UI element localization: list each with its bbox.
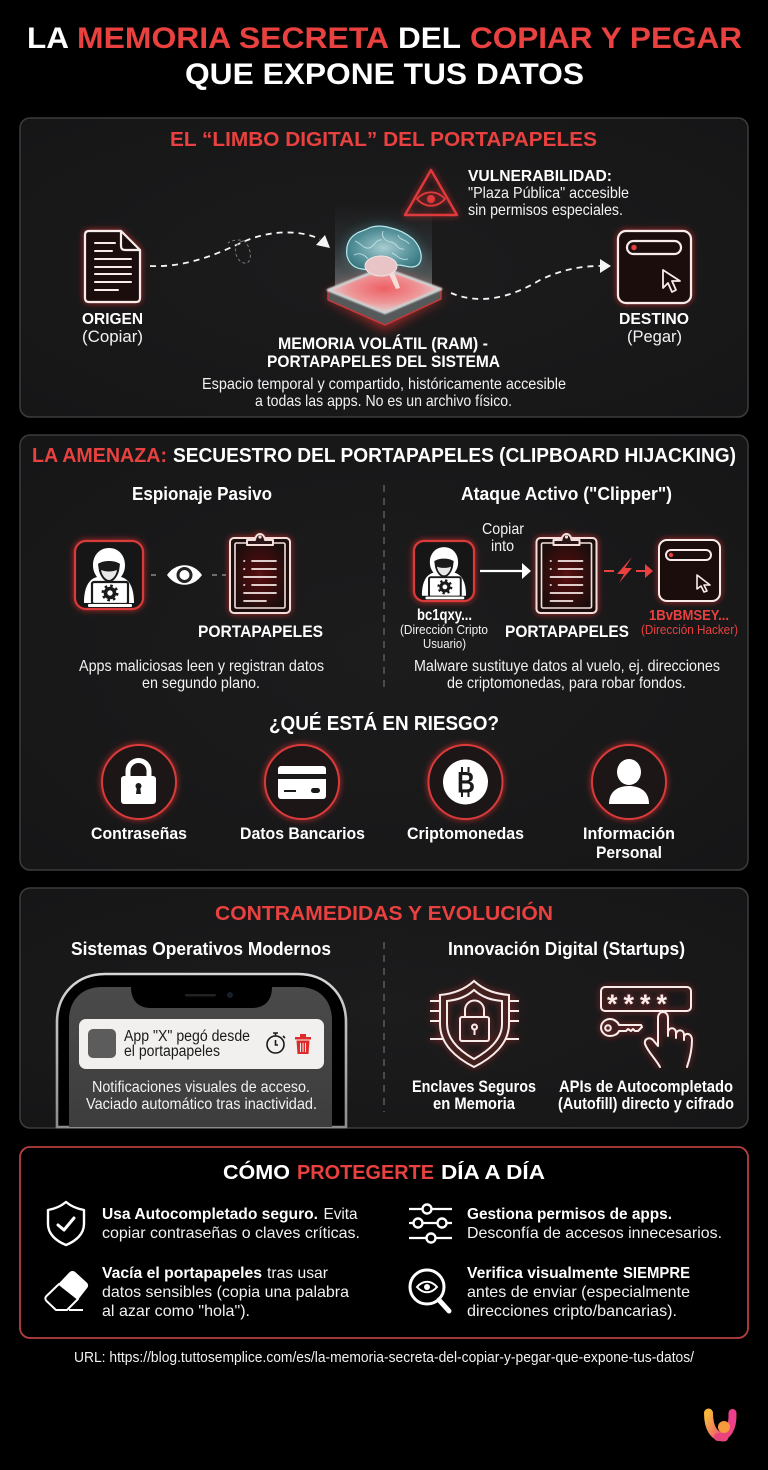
text: notification description: Vaciado automático tras inactividad. (86, 1096, 317, 1113)
callout: vulnerabilidad: "Plaza Pública" accesible (468, 185, 629, 202)
phone mockup (57, 974, 346, 1127)
heading: en riesgo: ¿QUÉ ESTÁ EN RIESGO? (269, 712, 499, 735)
title: COPIAR Y PEGAR (470, 22, 742, 55)
label: origen: ORIGEN (82, 311, 143, 328)
subheading: sistemas operativos: Sistemas Operativos Modernos (71, 939, 331, 959)
logo (708, 1413, 733, 1437)
tip: vacia: al azar como "hola"). (102, 1303, 250, 1320)
label: datos bancarios: Datos Bancarios (240, 825, 365, 843)
panel: limbo digital (20, 118, 748, 417)
tip: permisos: Desconfía de accesos innecesarios. (467, 1225, 722, 1242)
label: user address: Usuario) (423, 636, 466, 651)
icon: magnifier eye (410, 1270, 449, 1311)
title: LA (27, 22, 69, 55)
label: copiar into: Copiar (482, 521, 525, 538)
notification card: el portapapeles (124, 1043, 220, 1060)
label: enclaves: Enclaves Seguros (412, 1078, 536, 1096)
tip: autocompletado: Usa Autocompletado seguro. (102, 1206, 318, 1223)
heading: como protegerte: DÍA A DÍA (441, 1161, 545, 1184)
title: MEMORIA SECRETA (77, 22, 389, 55)
label: informacion personal: Personal (596, 844, 662, 862)
icon: brain on memory platform (325, 205, 444, 330)
tip: autocompletado: Evita (324, 1206, 358, 1223)
text: active description (414, 658, 720, 692)
label: contrasenas: Contraseñas (91, 825, 187, 843)
label: portapapeles passive: PORTAPAPELES (198, 623, 323, 641)
icon: check shield (48, 1202, 84, 1245)
label: hacker address (641, 607, 738, 637)
text: passive description: Apps maliciosas leen y registran datos (79, 658, 324, 675)
label: user address: bc1qxy... (417, 607, 472, 624)
icon: red lightning arrow (604, 557, 653, 583)
label: autofill: (Autofill) directo y cifrado (558, 1095, 734, 1113)
text: passive description (79, 658, 324, 692)
url: URL: https://blog.tuttosemplice.com/es/la-memoria-secreta-del-copiar-y-pegar-que-expone-tus-datos/ (74, 1349, 695, 1366)
icon: document (85, 231, 140, 302)
label: hacker address: (Dirección Hacker) (641, 623, 738, 637)
subheading: innovacion: Innovación Digital (Startups) (448, 939, 685, 959)
tip: permisos (467, 1206, 722, 1242)
label: user address (400, 607, 488, 651)
heading: la amenaza: LA AMENAZA: (32, 445, 167, 467)
title: DEL (398, 22, 461, 55)
panel: la amenaza (20, 435, 748, 870)
tip: autocompletado (102, 1206, 360, 1242)
text: active description: de criptomonedas, para robar fondos. (447, 675, 686, 692)
icon: eraser (45, 1271, 88, 1310)
icon: lock (102, 745, 176, 819)
icon: timer (267, 1033, 285, 1053)
tip: verifica: SIEMPRE (623, 1265, 690, 1282)
arrow: copy into clipboard (480, 563, 531, 579)
tip: vacia: tras usar (267, 1265, 329, 1282)
callout: vulnerabilidad (468, 168, 629, 219)
subheading: espionaje pasivo: Espionaje Pasivo (132, 484, 272, 504)
icon: clipboard passive (230, 534, 290, 613)
text: notification description: Notificaciones visuales de acceso. (92, 1079, 310, 1096)
tip: verifica: antes de enviar (especialmente (467, 1284, 690, 1301)
text: active description: Malware sustituye datos al vuelo, ej. direcciones (414, 658, 720, 675)
arrow: memoria to destino (451, 259, 611, 299)
label: portapapeles active: PORTAPAPELES (505, 623, 629, 641)
notification card (79, 1019, 324, 1069)
icon: password autofill (601, 987, 692, 1067)
label: destino: (Pegar) (627, 327, 682, 346)
icon: destino form (618, 231, 691, 303)
tip: verifica: direcciones cripto/bancarias). (467, 1303, 677, 1320)
tip: permisos: Gestiona permisos de apps. (467, 1206, 672, 1223)
divider (383, 485, 385, 692)
icon: warning eye (405, 170, 457, 215)
tip: vacia: Vacía el portapapeles (102, 1265, 262, 1282)
heading: como protegerte (223, 1160, 545, 1184)
label: user address: (Dirección Cripto (400, 622, 488, 637)
icon: card (265, 745, 339, 819)
icon: bitcoin: B (457, 766, 475, 800)
label: origen: (Copiar) (82, 327, 143, 346)
heading: limbo digital: EL “LIMBO DIGITAL” DEL PORTAPAPELES (170, 128, 597, 151)
icon: password autofill: **** (607, 989, 667, 1019)
title: QUE EXPONE TUS DATOS (185, 58, 584, 91)
panel: como protegerte (20, 1147, 748, 1338)
tip: autocompletado: copiar contraseñas o claves críticas. (102, 1225, 360, 1242)
label: criptomonedas: Criptomonedas (407, 825, 524, 843)
text: memoria description (202, 376, 566, 410)
arrow: origen to memoria (150, 232, 330, 266)
text: memoria description: a todas las apps. No es un archivo físico. (255, 393, 512, 410)
label: memoria volatil: MEMORIA VOLÁTIL (RAM) - (278, 334, 488, 353)
icon: trash (295, 1034, 311, 1054)
notification card: App "X" pegó desde (124, 1028, 250, 1045)
label: copiar into: into (491, 538, 514, 555)
text: memoria description: Espacio temporal y compartido, históricamente accesible (202, 376, 566, 393)
icon: hacker passive (75, 541, 143, 609)
icon: destination form (659, 540, 720, 601)
icon: sliders (409, 1204, 452, 1242)
callout: vulnerabilidad: VULNERABILIDAD: (468, 168, 612, 185)
divider (383, 942, 385, 1112)
panel: contramedidas (20, 888, 748, 1128)
icon: secure shield (430, 981, 519, 1067)
title (27, 22, 742, 91)
label: origen (82, 311, 143, 346)
tip: verifica: Verifica visualmente (467, 1265, 618, 1282)
callout: vulnerabilidad: sin permisos especiales. (468, 202, 623, 219)
tip: vacia: datos sensibles (copia una palabra (102, 1284, 349, 1301)
subheading: ataque activo: Ataque Activo ("Clipper") (461, 484, 672, 504)
tip: vacia (102, 1265, 349, 1320)
label: autofill (558, 1078, 734, 1113)
icon: eye with dashes (151, 565, 226, 585)
icon: clipboard active (536, 534, 596, 613)
label: destino (619, 311, 689, 346)
label: destino: DESTINO (619, 311, 689, 328)
icon: bitcoin (428, 745, 502, 819)
label: autofill: APIs de Autocompletado (559, 1078, 733, 1096)
icon: hacker active (414, 541, 474, 601)
label: copiar into (482, 521, 525, 555)
heading: como protegerte: PROTEGERTE (297, 1161, 434, 1184)
label: informacion personal (583, 825, 675, 862)
tip: verifica (467, 1265, 690, 1320)
icon: person (592, 745, 666, 819)
label: memoria volatil: PORTAPAPELES DEL SISTEMA (267, 353, 500, 371)
text: passive description: en segundo plano. (142, 675, 260, 692)
label: informacion personal: Información (583, 825, 675, 843)
label: memoria volatil (267, 334, 500, 371)
heading: como protegerte: CÓMO (223, 1160, 290, 1184)
label: enclaves (412, 1078, 536, 1113)
label: enclaves: en Memoria (433, 1095, 516, 1113)
label: hacker address: 1BvBMSEY... (649, 607, 729, 624)
heading: la amenaza: SECUESTRO DEL PORTAPAPELES (CLIPBOARD HIJACKING) (173, 445, 736, 467)
text: notification description (86, 1079, 317, 1113)
heading: contramedidas: CONTRAMEDIDAS Y EVOLUCIÓN (215, 901, 553, 925)
